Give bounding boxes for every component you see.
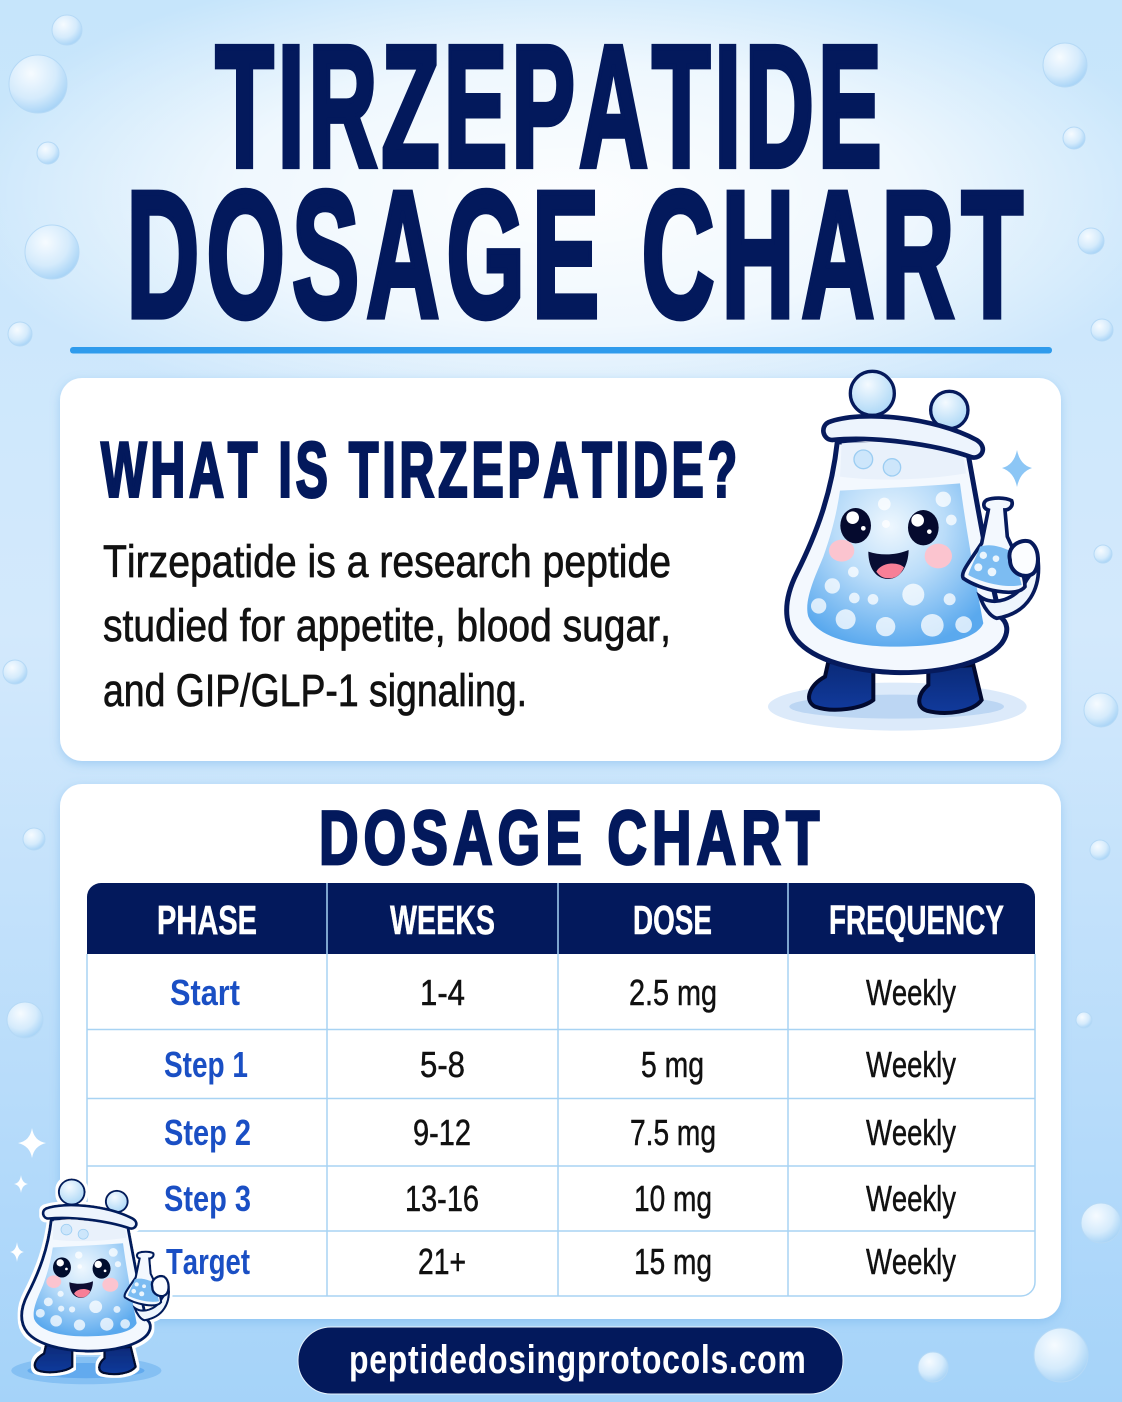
row: start: Weekly [866, 972, 956, 1013]
row: target: Weekly [866, 1241, 956, 1282]
row: target: 15 mg [634, 1241, 712, 1282]
footer pill [298, 1327, 843, 1394]
table header: FREQUENCY [829, 897, 1004, 943]
row: step 3: Weekly [866, 1178, 956, 1219]
row: step 1: 5-8 [420, 1044, 465, 1085]
dosage table [87, 883, 1035, 1296]
table header: PHASE [157, 897, 257, 943]
description text: and GIP/GLP-1 signaling. [103, 665, 527, 716]
icon: small flask mascot [11, 1179, 169, 1384]
description text [103, 536, 671, 716]
row: step 1: Step 1 [164, 1044, 248, 1085]
row: step 3 [164, 1178, 956, 1219]
panel: dosage chart [60, 784, 1061, 1319]
row: step 3: 10 mg [634, 1178, 712, 1219]
row: step 3: 13-16 [405, 1178, 479, 1219]
heading: dosage chart: DOSAGE CHART [319, 796, 819, 881]
row: step 1: Weekly [866, 1044, 956, 1085]
title divider [70, 347, 1052, 354]
row: step 1 [164, 1044, 956, 1085]
table header [157, 897, 1004, 943]
row: step 1: 5 mg [641, 1044, 704, 1085]
row: target: Target [166, 1241, 250, 1282]
row: step 2: Step 2 [164, 1112, 251, 1153]
panel: what is tirzepatide [60, 371, 1061, 761]
description text: Tirzepatide is a research peptide [103, 536, 671, 587]
icon: flask mascot [768, 371, 1038, 731]
table header: DOSE [633, 897, 712, 943]
footer pill: peptidedosingprotocols.com [349, 1337, 806, 1382]
title: DOSAGE CHART [126, 154, 1023, 355]
heading: what is tirzepatide: WHAT IS TIRZEPATIDE? [101, 426, 737, 513]
table header: WEEKS [390, 897, 495, 943]
description text: studied for appetite, blood sugar, [103, 600, 671, 651]
row: target [166, 1241, 956, 1282]
row: step 2: Weekly [866, 1112, 956, 1153]
icon: small sparkles [10, 1128, 46, 1262]
row: start: 1-4 [420, 972, 465, 1013]
title [126, 10, 1023, 355]
icon: sparkle [1002, 450, 1032, 487]
row: step 2: 9-12 [413, 1112, 471, 1153]
row: step 2 [164, 1112, 956, 1153]
row: step 2: 7.5 mg [630, 1112, 716, 1153]
row: start [170, 972, 956, 1013]
row: start: Start [170, 972, 240, 1013]
row: target: 21+ [418, 1241, 466, 1282]
title: TIRZEPATIDE [216, 10, 882, 203]
row: start: 2.5 mg [629, 972, 717, 1013]
row: step 3: Step 3 [164, 1178, 251, 1219]
